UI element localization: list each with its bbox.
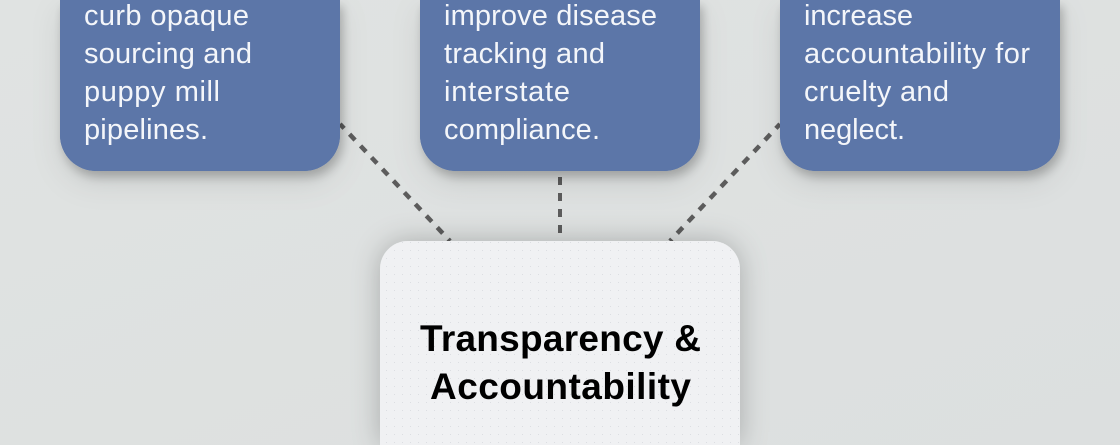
right card text: neglect. bbox=[804, 114, 905, 146]
connector: right card to center card bbox=[670, 124, 780, 241]
left card text: puppy mill bbox=[84, 76, 220, 108]
heading: Transparency & Accountability: Transparency & bbox=[420, 318, 701, 359]
panel: left card bbox=[60, 0, 340, 171]
left card text: pipelines. bbox=[84, 114, 208, 146]
panel: center card bbox=[380, 241, 740, 445]
left card text bbox=[84, 0, 252, 146]
connector: middle card to center card bbox=[558, 177, 562, 234]
right card text: cruelty and bbox=[804, 76, 949, 108]
connector: left card to center card bbox=[340, 124, 450, 241]
right card text: increase bbox=[804, 0, 913, 32]
middle card text: tracking and bbox=[444, 38, 605, 70]
middle card text bbox=[444, 0, 657, 146]
left card text: curb opaque bbox=[84, 0, 249, 32]
heading: Transparency & Accountability: Accountability bbox=[430, 366, 691, 407]
right card text bbox=[804, 0, 1030, 146]
panel: middle card bbox=[420, 0, 700, 171]
right card text: accountability for bbox=[804, 38, 1030, 70]
middle card text: improve disease bbox=[444, 0, 657, 32]
left card text: sourcing and bbox=[84, 38, 252, 70]
middle card text: interstate bbox=[444, 76, 570, 108]
heading: Transparency & Accountability bbox=[420, 318, 701, 407]
panel: right card bbox=[780, 0, 1060, 171]
middle card text: compliance. bbox=[444, 114, 600, 146]
